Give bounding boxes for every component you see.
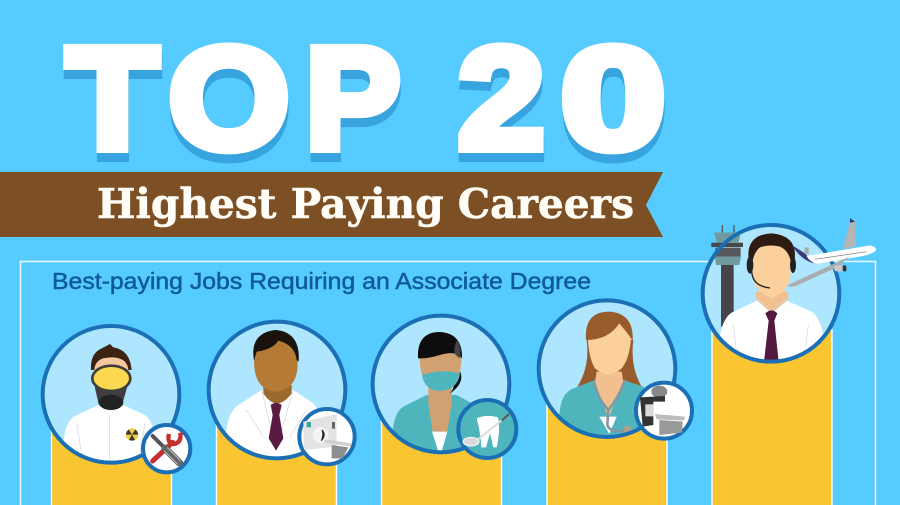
title shadow: TOP 20: P: [306, 27, 401, 188]
bar 1: [52, 420, 172, 505]
icon: airplane: [787, 218, 876, 287]
bar 3: [382, 415, 502, 505]
subheading: Best-paying Jobs Requiring an Associate Degree: [52, 268, 591, 294]
icon: tooth and dental mirror: [458, 400, 516, 458]
banner: Highest Paying Careers: Highest Paying Careers: [97, 180, 634, 228]
title: TOP 20: 0: [561, 18, 665, 179]
title shadow: TOP 20: 2: [459, 27, 545, 188]
headset: [752, 270, 770, 288]
icon: radiography machine: [636, 383, 692, 439]
title shadow: TOP 20: 0: [562, 27, 666, 188]
person 4: technologist with stethoscope: [539, 300, 692, 439]
person 1: radiation suit worker: [43, 326, 190, 472]
title: TOP 20: 2: [458, 18, 544, 179]
banner: Highest Paying Careers: [0, 172, 663, 237]
title: TOP 20: P: [306, 18, 400, 179]
person 3: dental worker with mask: [373, 316, 516, 458]
title: TOP 20: T: [67, 18, 158, 179]
title shadow: TOP 20: [67, 27, 666, 188]
title shadow: TOP 20: T: [67, 27, 159, 188]
bar 4: [547, 405, 667, 505]
icon: control tower: [711, 225, 743, 327]
person 5: air traffic controller with tower and plane: [703, 218, 876, 363]
title shadow: TOP 20: O: [169, 27, 290, 188]
person 2: doctor in white coat: [209, 322, 355, 464]
icon: CT scanner: [299, 409, 355, 464]
title: TOP 20: O: [169, 18, 289, 179]
icon: wrench and screwdriver: [143, 425, 190, 472]
bar 5: [712, 330, 832, 505]
bar 2: [216, 415, 336, 505]
title: TOP 20: [67, 18, 665, 179]
